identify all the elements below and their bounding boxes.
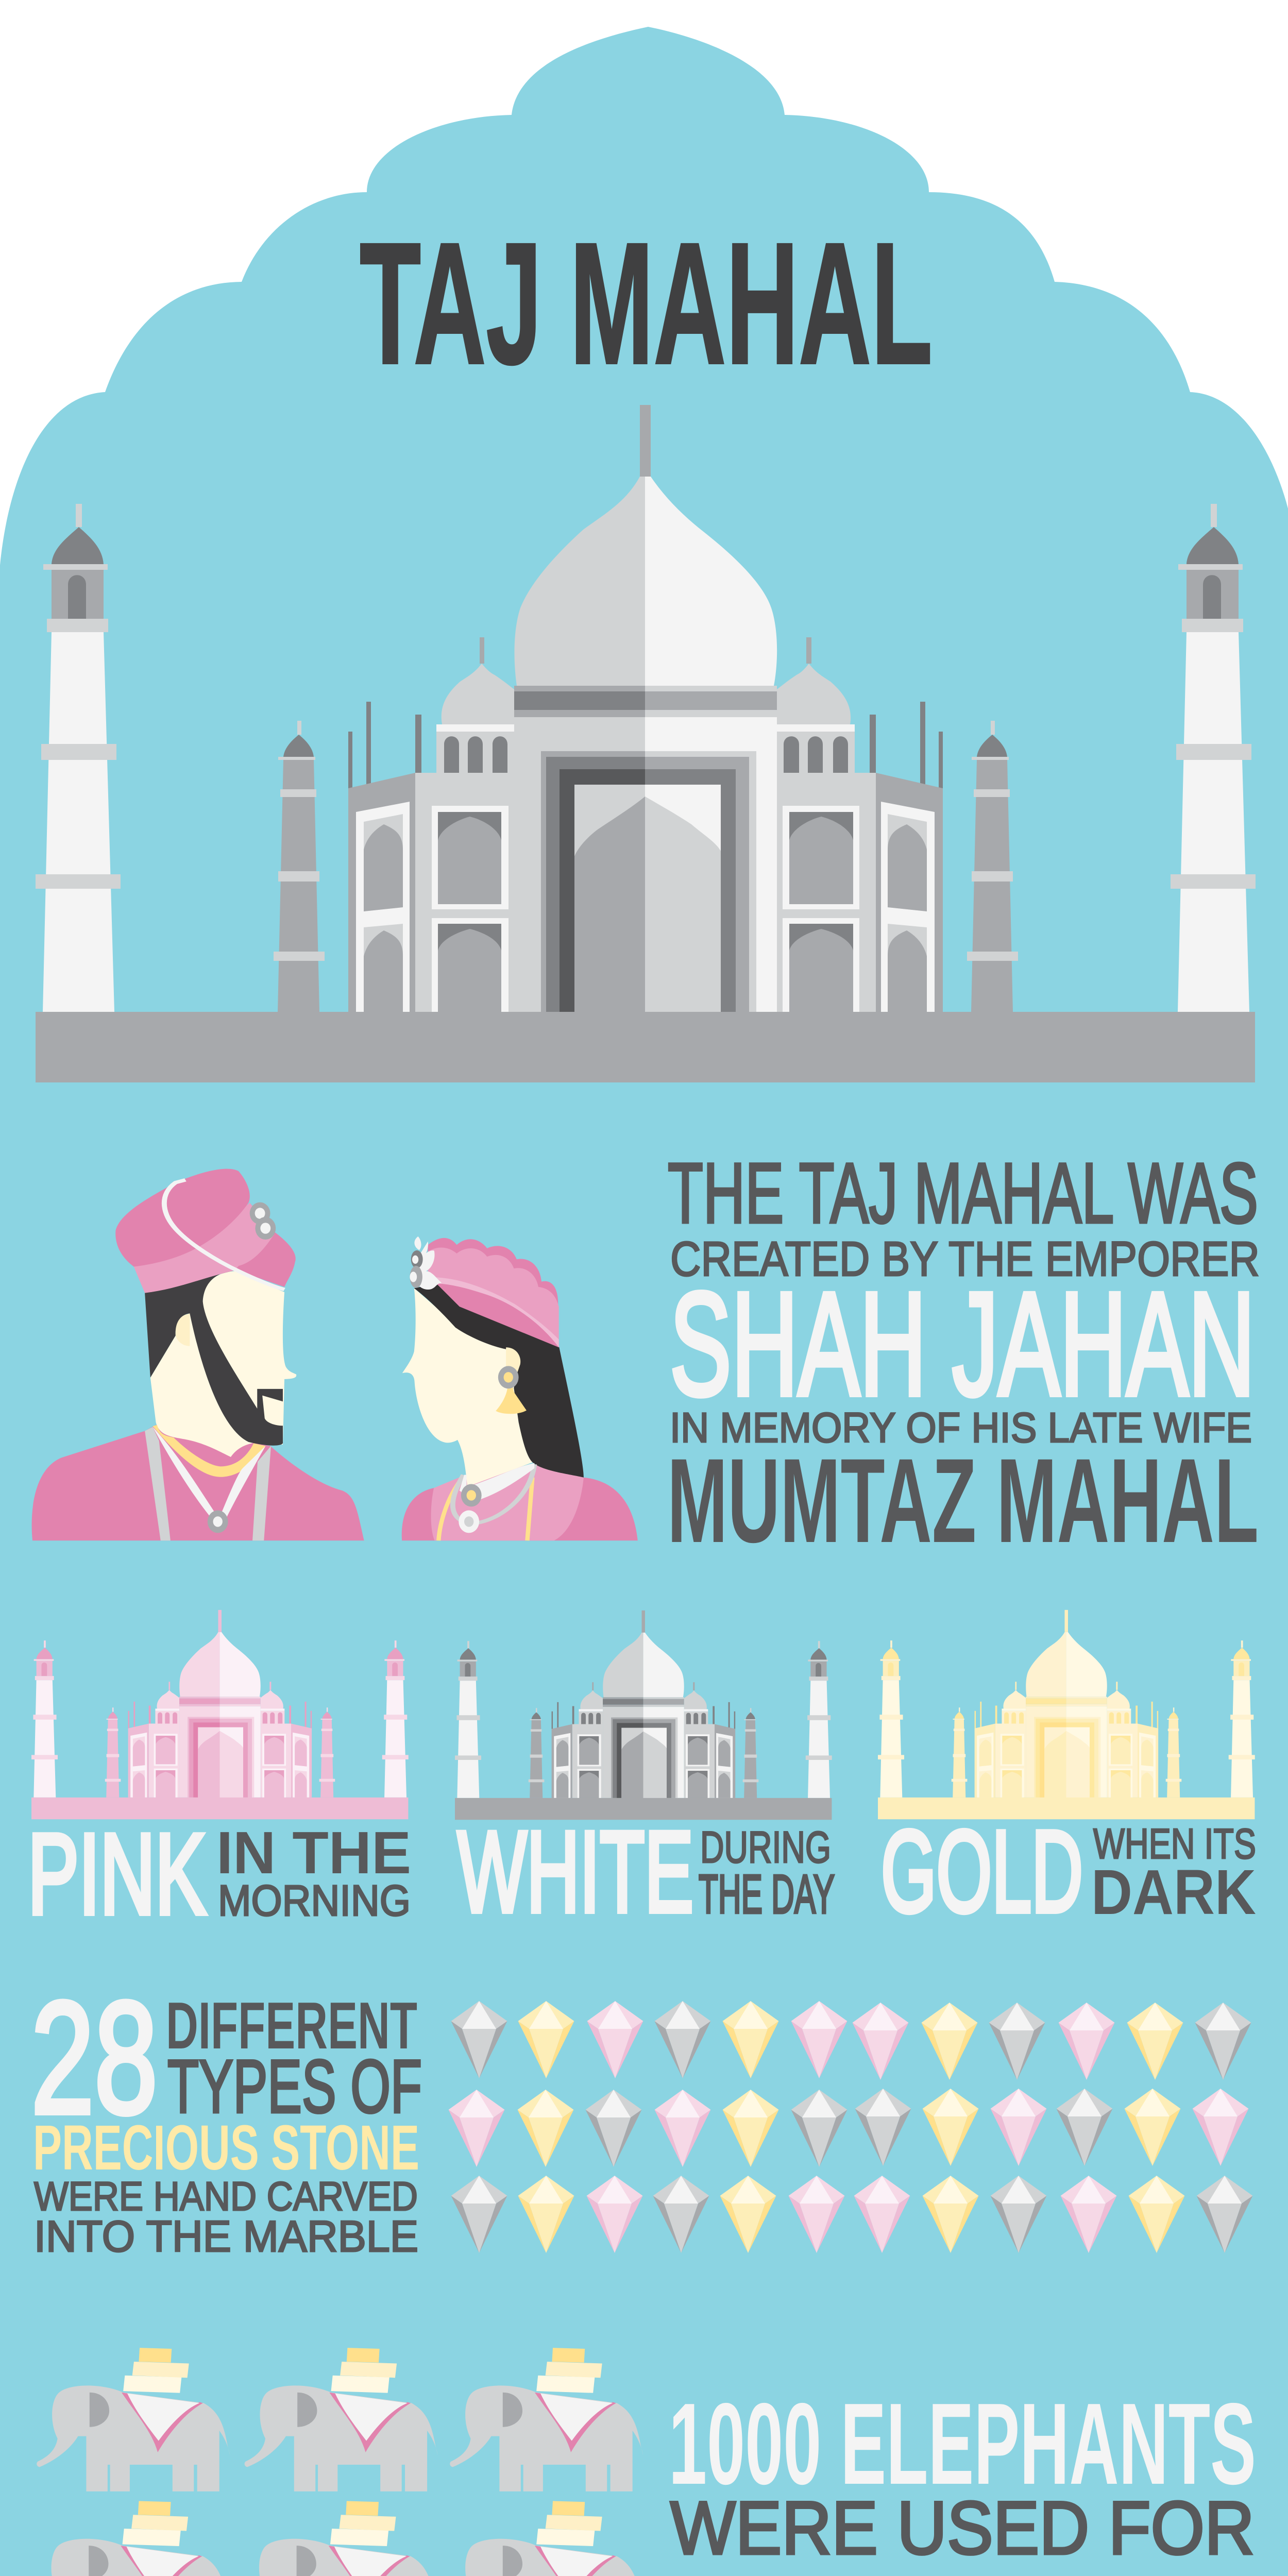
label: in the: IN THE (216, 1819, 411, 1886)
gem row 2 (448, 2089, 1249, 2167)
figure: Mumtaz Mahal (402, 1236, 638, 1540)
line: were hand carved: WERE HAND CARVED (34, 2173, 418, 2219)
panel: pink in the morning (28, 1610, 411, 1938)
text block: elephants (669, 2379, 1259, 2576)
label: gold: GOLD (881, 1806, 1083, 1936)
label: the day: THE DAY (699, 1864, 835, 1925)
label: during: DURING (700, 1823, 831, 1872)
line: precious stone: PRECIOUS STONE (33, 2113, 419, 2183)
line: types of: TYPES OF (167, 2044, 422, 2128)
text block: precious stones (31, 1968, 422, 2261)
icon: pink Taj Mahal (31, 1610, 409, 1819)
illustration: main Taj Mahal (36, 405, 1256, 1082)
panel: gold when its dark (878, 1610, 1256, 1936)
icon: gold Taj Mahal (878, 1610, 1255, 1819)
line: into the marble: INTO THE MARBLE (34, 2212, 418, 2261)
label: dark: DARK (1091, 1857, 1256, 1928)
gem row 1 (451, 2001, 1251, 2080)
chart: elephants (36, 2348, 643, 2576)
line: in memory of his late wife: IN MEMORY OF HIS LATE WIFE (670, 1404, 1252, 1451)
line: different: DIFFERENT (166, 1989, 417, 2063)
label: morning: MORNING (218, 1876, 411, 1925)
illustration: Shah Jahan and Mumtaz Mahal (32, 1169, 638, 1540)
label: white: WHITE (457, 1808, 693, 1936)
number: 28: 28 (31, 1968, 158, 2147)
figure: Shah Jahan (32, 1169, 364, 1540)
line: were used for: WERE USED FOR (670, 2486, 1255, 2570)
label: pink: PINK (28, 1810, 206, 1938)
icon: white Taj Mahal (455, 1611, 832, 1820)
panel: white during the day (455, 1611, 835, 1936)
text block: Taj Mahal creation (667, 1146, 1260, 1568)
gem row 3 (451, 2176, 1253, 2253)
chart: gemstones grid (448, 2001, 1253, 2253)
